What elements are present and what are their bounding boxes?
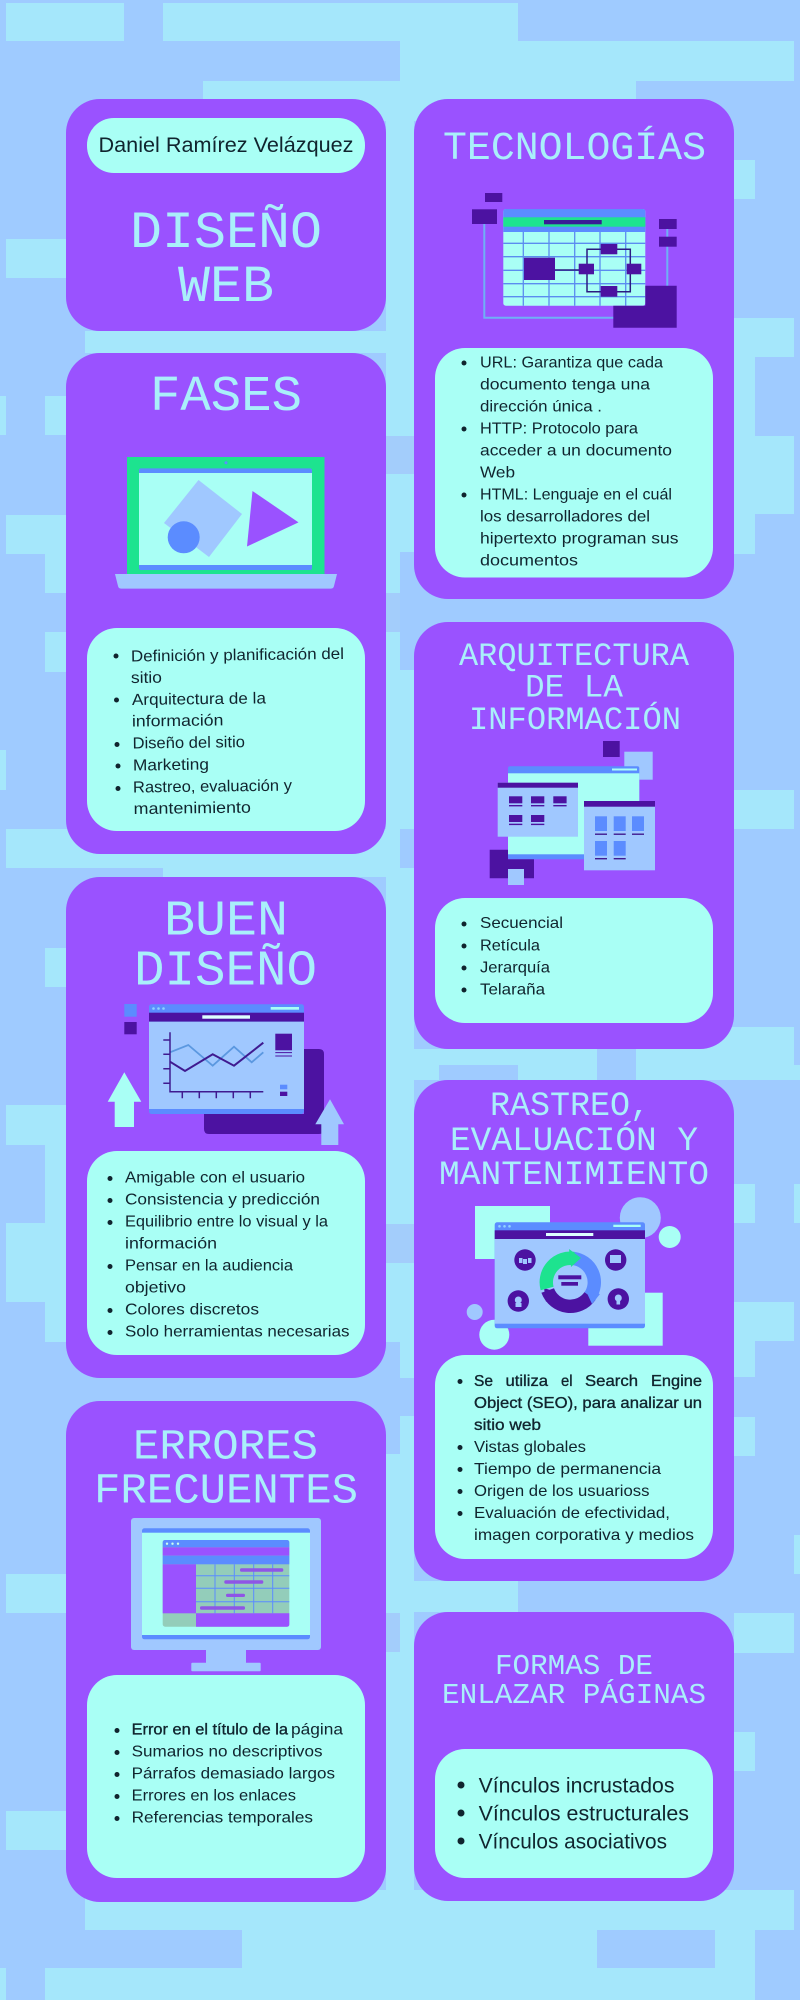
list: errores frecuentes: Errores en los enlaces [132,1788,296,1805]
list: buen diseño: objetivo [125,1280,186,1297]
list: rastreo, evaluación y mantenimiento: Origen de los usuarioss [474,1483,650,1500]
list: fases: información [132,712,224,730]
list: buen diseño: información [125,1236,217,1253]
list: rastreo, evaluación y mantenimiento: Se [474,1373,493,1390]
heading: tecnologías: TECNOLOGÍAS [443,125,706,172]
list: rastreo, evaluación y mantenimiento: imagen corporativa y medios [474,1527,694,1544]
list: fases: Arquitectura de la [132,690,266,709]
list: fases: Diseño del sitio [132,734,245,752]
heading: rastreo, evaluación y mantenimiento: RASTREO, [490,1088,650,1126]
list: buen diseño: Solo herramientas necesarias [125,1324,350,1341]
icon: desktop monitor [131,1518,321,1671]
list: tecnologías: HTTP: Protocolo para [480,421,638,438]
panel: errores frecuentes [66,1401,386,1902]
heading: arquitectura de la información: INFORMACIÓN [469,702,681,739]
list: arquitectura de la información: Telaraña [480,982,545,998]
list: tecnologías: hipertexto programan sus [480,530,678,547]
heading: buen diseño: DISEÑO [134,942,317,1000]
list: arquitectura de la información [435,898,713,1023]
list: buen diseño [87,1151,365,1355]
list: rastreo, evaluación y mantenimiento [435,1355,713,1559]
list: arquitectura de la información: Secuencial [480,915,563,932]
list: tecnologías: los desarrolladores del [480,509,650,526]
icon: site map table [472,193,677,328]
list: buen diseño: Colores discretos [125,1302,259,1319]
list: arquitectura de la información: Retícula [480,938,540,954]
list: errores frecuentes: página [291,1722,343,1739]
list: rastreo, evaluación y mantenimiento: Search [585,1373,638,1390]
heading: arquitectura de la información [459,638,690,739]
list: tecnologías: URL: Garantiza que cada [480,354,663,371]
heading: formas de enlazar páginas [442,1650,706,1712]
heading: arquitectura de la información: ARQUITECTURA [459,638,690,675]
icon: chart window with arrows [108,1004,344,1145]
heading: rastreo, evaluación y mantenimiento: EVALUACIÓN Y [450,1122,698,1161]
list: errores frecuentes: Párrafos demasiado largos [132,1766,335,1783]
heading: arquitectura de la información: DE LA [525,670,624,706]
heading: errores frecuentes: ERRORES [133,1422,318,1472]
list: formas de enlazar páginas [435,1749,713,1878]
list: rastreo, evaluación y mantenimiento: Object (SEO), para analizar un [474,1395,702,1412]
author name pill [87,118,365,173]
main title: WEB [178,258,274,317]
main title [130,204,322,317]
heading: errores frecuentes [94,1422,358,1516]
list: tecnologías: HTML: Lenguaje en el cuál [480,486,672,503]
list: formas de enlazar páginas: Vínculos incrustados [479,1775,674,1798]
list: errores frecuentes: Error en el título de la [132,1722,288,1739]
panel: buen diseño [66,877,386,1378]
main title: DISEÑO [130,204,322,263]
list: fases [87,628,365,831]
heading: fases: FASES [150,369,302,426]
heading: buen diseño [134,894,317,1000]
list: fases: Rastreo, evaluación y [133,778,292,796]
heading: rastreo, evaluación y mantenimiento [439,1088,709,1195]
list: rastreo, evaluación y mantenimiento: el [561,1373,572,1390]
icon: analytics window with cycle [467,1197,681,1350]
list: tecnologías: Web [480,465,515,482]
icon: browser windows with folders and files [490,741,655,885]
list: fases: mantenimiento [134,800,251,818]
list: rastreo, evaluación y mantenimiento: Tiempo de permanencia [474,1461,661,1478]
list: buen diseño: Consistencia y predicción [125,1192,320,1209]
list: tecnologías: documentos [480,553,578,570]
list: tecnologías [435,348,713,578]
list: buen diseño: Equilibrio entre lo visual y la [125,1214,328,1231]
list: rastreo, evaluación y mantenimiento: Engine [651,1373,702,1390]
panel: tecnologías [414,99,734,599]
list: fases: Marketing [133,757,209,774]
list: tecnologías: documento tenga una [480,377,650,394]
list: arquitectura de la información: Jerarquía [480,960,550,976]
list: rastreo, evaluación y mantenimiento: sitio web [474,1417,541,1434]
list: fases: sitio [131,670,162,687]
list: rastreo, evaluación y mantenimiento: utiliza [506,1373,548,1390]
list: formas de enlazar páginas: Vínculos estructurales [479,1803,689,1826]
icon: laptop with play symbol [115,457,337,589]
panel: title card [66,99,386,331]
list: formas de enlazar páginas: Vínculos asociativos [479,1831,667,1854]
list: rastreo, evaluación y mantenimiento: Vistas globales [474,1439,586,1456]
list: errores frecuentes [87,1675,365,1878]
heading: rastreo, evaluación y mantenimiento: MANTENIMIENTO [439,1157,709,1195]
panel: formas de enlazar páginas [414,1612,734,1901]
list: rastreo, evaluación y mantenimiento: Evaluación de efectividad, [474,1505,670,1522]
list: buen diseño: Pensar en la audiencia [125,1258,293,1275]
list: buen diseño: Amigable con el usuario [125,1170,305,1187]
heading: formas de enlazar páginas: ENLAZAR PÁGINAS [442,1678,706,1712]
heading: buen diseño: BUEN [164,894,288,950]
panel: arquitectura de la información [414,622,734,1049]
list: fases: Definición y planificación del [131,646,344,665]
author name pill: Daniel Ramírez Velázquez [98,134,354,157]
panel: fases [66,353,386,854]
list: tecnologías: dirección única . [480,398,602,415]
heading: errores frecuentes: FRECUENTES [94,1466,358,1516]
list: errores frecuentes: Referencias temporales [132,1810,313,1827]
heading: formas de enlazar páginas: FORMAS DE [495,1650,653,1683]
list: tecnologías: acceder a un documento [480,442,672,459]
list: errores frecuentes: Sumarios no descriptivos [132,1744,322,1761]
panel: rastreo, evaluación y mantenimiento [414,1080,734,1581]
